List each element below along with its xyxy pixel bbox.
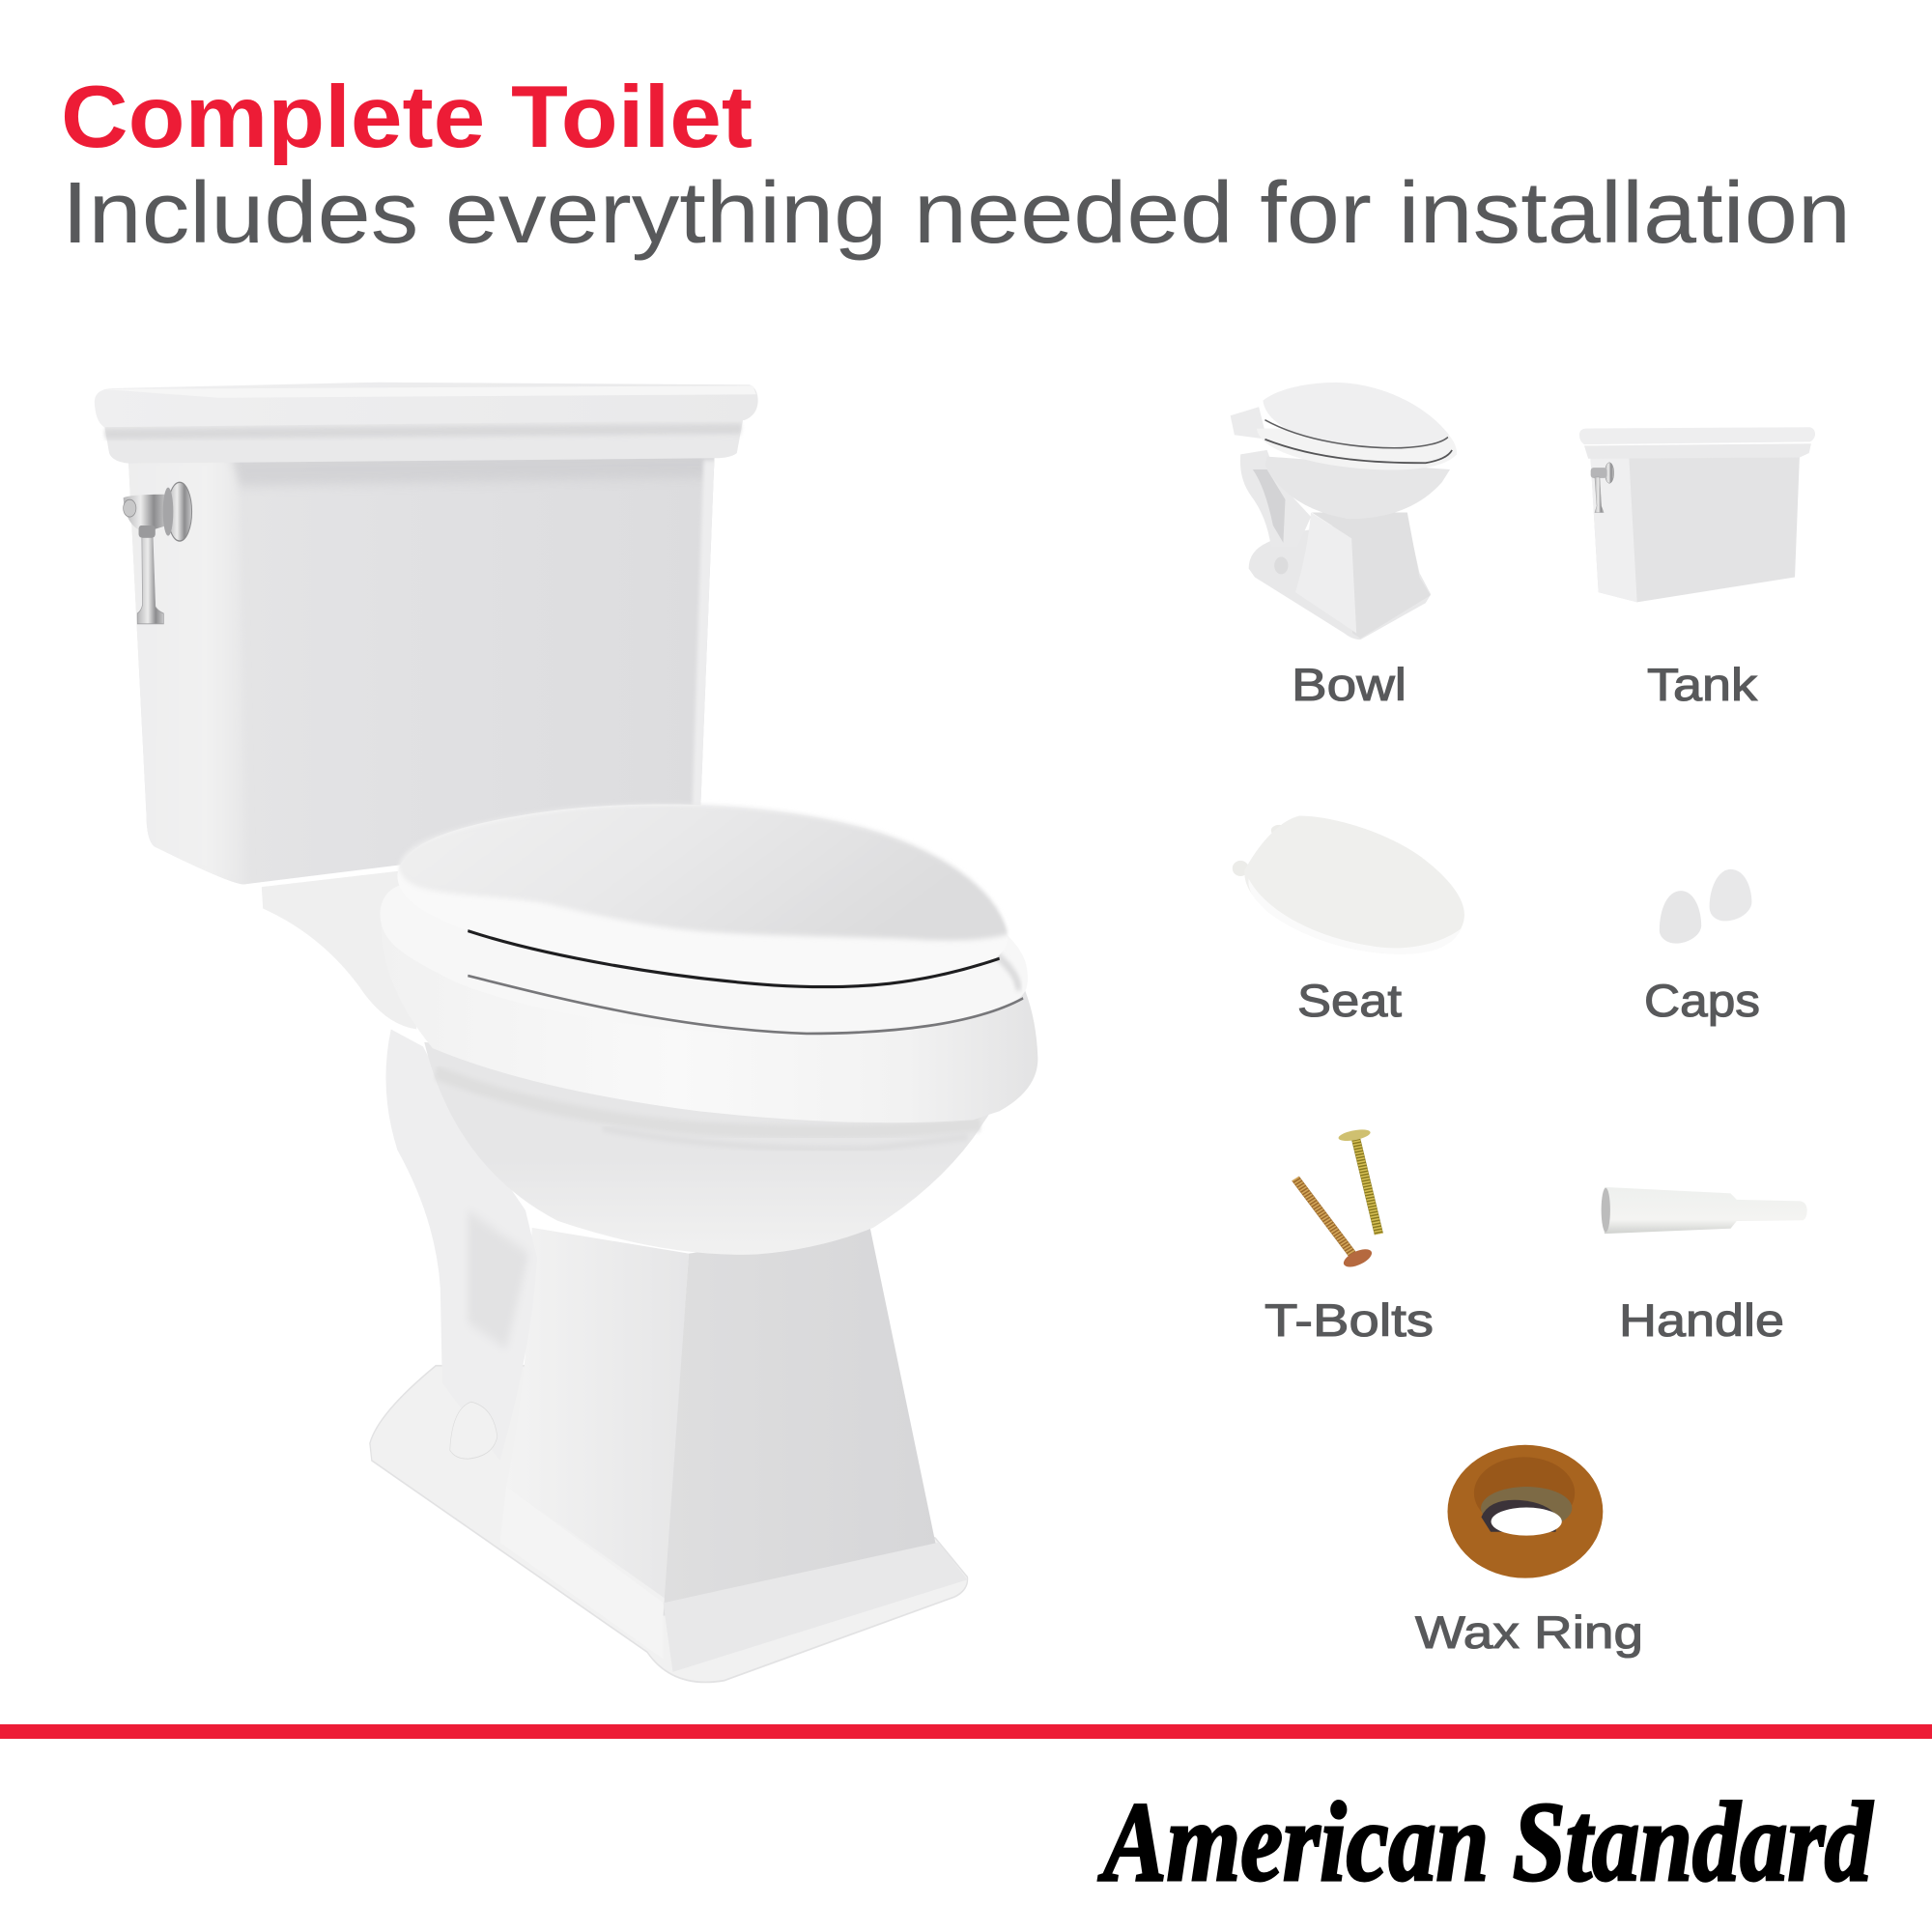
part: wax ring (1415, 1445, 1643, 1658)
label: Seat: Seat (1297, 975, 1402, 1026)
label: Handle: Handle (1619, 1294, 1784, 1346)
bowl underside (424, 1042, 1006, 1255)
bowl grooves (436, 1072, 980, 1149)
title (61, 69, 1851, 262)
icon: handle (1602, 1187, 1807, 1234)
part: t-bolts (1264, 1127, 1434, 1346)
part: bowl (1231, 383, 1457, 710)
part: tank (1579, 427, 1815, 710)
icon: wax ring (1447, 1445, 1603, 1578)
heading: Complete Toilet: Complete Toilet (61, 69, 753, 166)
label: T-Bolts: T-Bolts (1264, 1294, 1434, 1346)
icon: bowl (1231, 383, 1457, 639)
icon: caps (1660, 869, 1751, 944)
label: Wax Ring: Wax Ring (1415, 1606, 1643, 1658)
part: handle (1602, 1187, 1807, 1346)
subheading: Includes everything needed for installation (62, 165, 1851, 262)
bowl rim (382, 925, 1037, 1122)
trapway shading (468, 1210, 528, 1349)
tank lid (95, 383, 758, 464)
main toilet illustration (95, 383, 1037, 1682)
icon: t-bolts (1295, 1127, 1378, 1270)
tank-to-bowl bridge (262, 870, 416, 1029)
icon: tank (1579, 427, 1815, 602)
parts grid (1231, 383, 1815, 1658)
bolt cap on foot (450, 1402, 497, 1459)
label: Tank: Tank (1647, 659, 1758, 710)
pedestal (499, 1228, 967, 1672)
trapway (385, 1029, 537, 1461)
label: Caps: Caps (1644, 975, 1760, 1026)
flush handle (124, 482, 192, 624)
icon: seat (1233, 816, 1464, 954)
part: caps (1644, 869, 1760, 1026)
seat ring (380, 883, 1028, 1034)
red divider (0, 1724, 1932, 1739)
foot of the base (370, 1366, 968, 1682)
tank body (119, 451, 718, 892)
label: Bowl: Bowl (1292, 659, 1406, 710)
seat lid (397, 805, 1008, 987)
part: seat (1233, 816, 1464, 1026)
